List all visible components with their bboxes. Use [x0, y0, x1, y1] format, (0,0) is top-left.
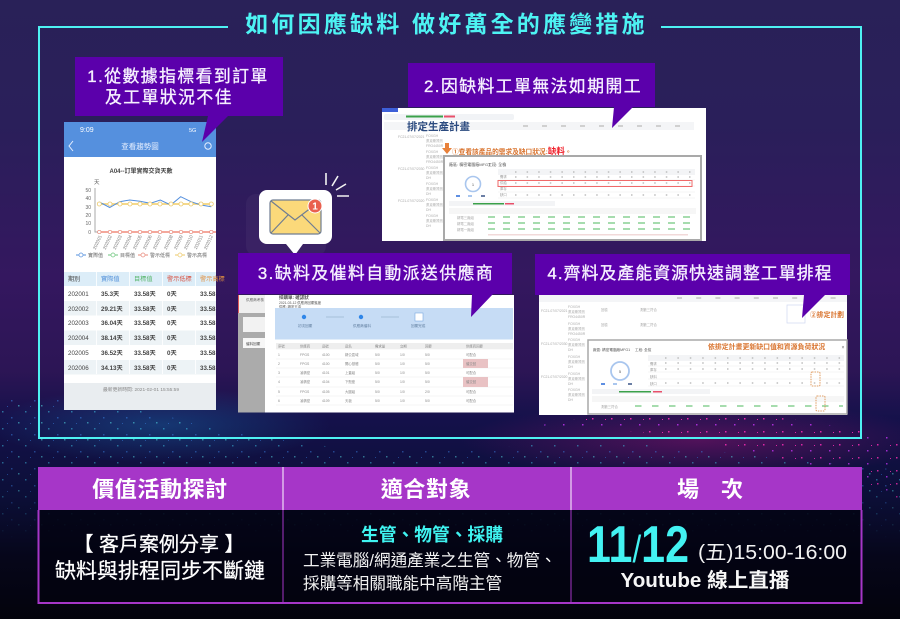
supplier table: 5/0	[425, 353, 430, 357]
data table: 0天	[167, 320, 177, 327]
data table: 34.13天	[101, 365, 123, 372]
line chart: 202004	[122, 234, 133, 250]
modal: 精電二廠組	[457, 221, 475, 226]
schedule rows: 測數三符合	[640, 307, 658, 312]
column: audience: 工業電腦/網通產業之生管、物管、	[303, 551, 557, 570]
supplier table: 4100	[322, 362, 330, 366]
heading: schedule: 排定生產計畫	[407, 120, 470, 133]
supplier table: 5/0	[375, 390, 380, 394]
supplier table: 1/0	[400, 390, 405, 394]
column: value topic: 價值活動探討	[92, 477, 228, 502]
line chart: 202006	[142, 234, 153, 250]
left column rows: FOXGH	[426, 198, 439, 202]
supplier table: 回覆	[425, 344, 432, 348]
panel 4: rescheduling screenshot	[539, 295, 847, 415]
schedule rows: DH	[568, 348, 573, 352]
data table: 202001	[68, 291, 89, 298]
schedule rows: FC21-07/07/2020	[541, 375, 568, 379]
supplier table: 品號	[322, 344, 329, 348]
data table: 33.58	[200, 365, 216, 372]
supplier table: 5/0	[375, 371, 380, 375]
supplier table: 序號	[278, 344, 285, 348]
phone footer: 最新更新時間: 2021-02-01 15:55:59	[103, 386, 179, 393]
supplier table: 凌精密	[300, 370, 311, 375]
progress steps: 初次回覆	[298, 323, 313, 328]
supplier table: 下殼座	[345, 379, 356, 384]
modal	[588, 340, 847, 414]
column: value topic: 【 客戶案例分享 】	[73, 533, 245, 556]
schedule rows: 奧克斯資訊	[568, 392, 586, 397]
dashed highlights	[811, 372, 820, 386]
panel 3: supplier dispatch screenshot	[238, 294, 514, 412]
column: audience: 生管、物管、採購	[361, 524, 503, 545]
progress steps: 回覆完成	[411, 323, 426, 328]
phone header: 查看趨勢圖	[121, 141, 159, 151]
phone header: 9:09	[80, 127, 94, 134]
data table: 0天	[167, 291, 177, 298]
left column rows: FOXGH	[426, 214, 439, 218]
schedule rows: FOXGH	[568, 355, 581, 359]
supplier table: 2/0	[425, 390, 430, 394]
title frame	[39, 27, 861, 438]
column: value topic: 缺料與排程同步不斷鏈	[55, 560, 265, 583]
supplier table: 5/0	[425, 371, 430, 375]
column: value topic	[55, 477, 265, 583]
schedule rows: FOXGH	[568, 338, 581, 342]
left column rows: 奧克斯資訊	[426, 202, 444, 207]
schedule rows	[541, 305, 658, 402]
line chart: 202003	[112, 234, 123, 250]
modal: 需求	[500, 174, 507, 179]
modal: 缺料	[650, 374, 657, 379]
supplier table: 5	[278, 390, 280, 394]
data table: 33.58	[200, 320, 216, 327]
data table: 警示低標	[167, 275, 192, 283]
supplier table: 1	[278, 353, 280, 357]
supplier table: 2	[278, 362, 280, 366]
callout 1: 及工單狀況不佳	[105, 88, 233, 107]
data table: 0天	[167, 350, 177, 357]
icon: envelope notification: 1	[312, 202, 318, 212]
left column rows: 奧克斯資訊	[426, 186, 444, 191]
line chart: 202007	[152, 234, 163, 250]
modal heading: 依排定計畫更新缺口值和資源負荷狀況	[708, 342, 825, 351]
supplier table: 4105	[322, 390, 330, 394]
data table: 33.58	[200, 291, 216, 298]
line chart: 202002	[102, 234, 113, 250]
supplier table: 1/0	[400, 399, 405, 403]
schedule rows: 奧克斯資訊	[568, 309, 586, 314]
line chart: 警示高標	[187, 252, 207, 259]
column: audience: 適合對象	[381, 477, 471, 502]
line chart: 40	[85, 196, 91, 202]
left column rows: FOXGH	[426, 150, 439, 154]
data table: 目標值	[134, 275, 153, 283]
data table: 33.58天	[134, 306, 156, 313]
callout 3: 3.缺料及催料自動派送供應商	[258, 263, 494, 283]
line chart: 天	[94, 179, 100, 186]
icon: envelope notification	[246, 173, 349, 256]
line chart: 警示低標	[150, 252, 170, 259]
data table: 0天	[167, 335, 177, 342]
supplier table: 催交回	[466, 379, 477, 384]
supplier table: 品名	[345, 344, 352, 348]
panel 1: phone screenshot	[64, 122, 225, 410]
line chart: 目標值	[120, 252, 135, 259]
line chart	[76, 167, 216, 259]
schedule rows: FC21-07/07/2021	[541, 309, 568, 313]
line chart: A04--訂單實際交貨天數	[109, 167, 173, 175]
supplier table: 供應商回覆	[466, 344, 484, 348]
supplier table: 凌精密	[300, 398, 311, 403]
data table: 33.58	[200, 306, 216, 313]
data table: 29.21天	[101, 306, 123, 313]
modal: 廠區: 精密電腦廠MFG1	[593, 347, 630, 352]
phone footer	[64, 383, 216, 410]
supplier table: 1/0	[400, 362, 405, 366]
supplier table: 凌精密	[300, 379, 311, 384]
phone header: 5G	[189, 128, 196, 134]
left column rows: FOXGH	[426, 166, 439, 170]
supplier table: 可配合	[466, 398, 477, 403]
modal: 工段: 全檢	[635, 347, 652, 352]
supplier table: 4104	[322, 380, 330, 384]
data table: 202003	[68, 320, 89, 327]
line chart: 20	[85, 213, 91, 219]
left column rows: DH	[426, 176, 431, 180]
supplier table: 上蓋組	[345, 370, 356, 375]
schedule rows: FC21-07/07/2030	[541, 342, 568, 346]
donut	[466, 176, 480, 192]
modal: ×	[842, 345, 845, 351]
supplier table: 1/0	[400, 371, 405, 375]
supplier table: 可配合	[466, 370, 477, 375]
page info: 採購單: 確認狀	[279, 294, 309, 301]
demand grid	[648, 355, 844, 361]
page info: 2021-03-12 供應商回覆進度	[279, 300, 322, 305]
supplier table: 精公區域	[345, 352, 359, 357]
modal: 缺口	[650, 381, 657, 386]
modal: 需求	[650, 361, 657, 366]
modal: 精電三廠組	[457, 215, 475, 220]
data table: 202002	[68, 306, 89, 313]
supplier table: 可配合	[466, 352, 477, 357]
line chart: 202010	[183, 234, 194, 250]
status bar	[384, 114, 514, 120]
supplier table: 可配合	[466, 389, 477, 394]
supplier table: 5/0	[425, 380, 430, 384]
line chart: 202001	[92, 234, 103, 250]
annotation: ①查看該產品的需求及缺口狀況:缺料。	[452, 146, 572, 156]
plan input cell	[787, 305, 805, 323]
left column rows: FOXGH	[426, 182, 439, 186]
data table: 202006	[68, 365, 89, 372]
supplier table: 大圓組	[345, 389, 356, 394]
supplier table: 5/0	[425, 399, 430, 403]
supplier table: 6	[278, 399, 280, 403]
line chart: 202008	[163, 234, 174, 250]
left column rows: 奧克斯資訊	[426, 154, 444, 159]
left column rows: FC21-07/07/2021	[398, 135, 425, 139]
schedule rows: DH	[568, 365, 573, 369]
schedule rows: 奧克斯資訊	[568, 359, 586, 364]
supplier table: 4101	[322, 371, 330, 375]
data table: 33.58天	[134, 365, 156, 372]
data table: 期別	[68, 275, 80, 283]
data table: 36.04天	[101, 320, 123, 327]
supplier table: 5/0	[375, 353, 380, 357]
callout 4	[535, 254, 850, 318]
schedule rows: 奧克斯資訊	[568, 376, 586, 381]
supplier table: 3	[278, 371, 280, 375]
column: session	[587, 477, 847, 592]
callout 1: 1.從數據指標看到訂單	[87, 67, 269, 86]
left column rows: 奧克斯資訊	[426, 138, 444, 143]
modal: 供給	[500, 180, 507, 185]
schedule rows: FOXGH	[568, 372, 581, 376]
resource bar	[449, 201, 555, 206]
progress steps: 供應商催料	[353, 323, 371, 328]
supplier table: 5/0	[425, 362, 430, 366]
data table: 實際值	[101, 275, 120, 283]
column: session: (五)15:00-16:00	[698, 542, 847, 564]
data table: 33.58	[200, 350, 216, 357]
data table: 0天	[167, 306, 177, 313]
supplier table: FPGS	[300, 353, 310, 357]
progress steps	[275, 308, 513, 340]
modal: 精電一廠組	[457, 227, 475, 232]
schedule rows: FRO4450R	[568, 332, 586, 336]
sidebar: 催料回覆	[246, 341, 261, 346]
schedule rows: 奧克斯資訊	[568, 342, 586, 347]
column: audience	[303, 477, 557, 593]
schedule rows: FOXGH	[568, 322, 581, 326]
data table: 35.3天	[101, 291, 120, 298]
info table	[38, 467, 862, 603]
icon: orange down arrow	[442, 143, 452, 154]
left column rows: FC21-07/07/2030	[398, 167, 425, 171]
line chart: 202012	[203, 234, 214, 250]
supplier table: 1/0	[400, 353, 405, 357]
data table: 202004	[68, 335, 89, 342]
line chart: 0	[88, 230, 91, 236]
data table	[64, 272, 225, 374]
schedule rows: DH	[568, 398, 573, 402]
schedule rows: 奧克斯資訊	[568, 326, 586, 331]
load row	[592, 396, 844, 402]
column: audience: 採購等相關職能中高階主管	[303, 574, 502, 593]
left column rows: FOXGH	[426, 134, 439, 138]
callout 2: 2.因缺料工單無法如期開工	[424, 77, 642, 96]
supplier table: 天板	[345, 398, 352, 403]
line chart: 50	[85, 188, 91, 194]
title: 如何因應缺料 做好萬全的應變措施	[245, 11, 648, 37]
line chart: 202009	[173, 234, 184, 250]
supplier table: 5/0	[375, 362, 380, 366]
resource bar	[592, 389, 710, 394]
supplier table: 需求量	[375, 344, 386, 348]
left column rows: 奧克斯資訊	[426, 170, 444, 175]
data table: 33.58天	[134, 320, 156, 327]
schedule rows: 回檢	[601, 307, 608, 312]
annotation: schedule plan: ②排定計劃	[810, 310, 844, 319]
callout 4: 4.齊料及產能資源快速調整工單排程	[547, 264, 833, 283]
data table: 0天	[167, 365, 177, 372]
data table: 36.52天	[101, 350, 123, 357]
data table: 警示高標	[200, 275, 225, 283]
supplier table: 開心基礎	[345, 361, 359, 366]
supplier table: 催交回	[466, 361, 477, 366]
highlighted shortage row	[498, 180, 692, 186]
sidebar: 供應商考核	[246, 297, 264, 302]
line chart: 30	[85, 205, 91, 211]
load grid	[449, 208, 696, 214]
supplier table: 交期	[400, 344, 407, 348]
data table: 33.58	[200, 335, 216, 342]
line chart: 202011	[193, 234, 204, 250]
schedule rows: DH	[568, 382, 573, 386]
data table: 33.58天	[134, 291, 156, 298]
supplier table: 4100	[322, 353, 330, 357]
left column rows: FC21-07/07/2020	[398, 199, 425, 203]
modal: 缺口	[500, 192, 507, 197]
supplier table: FPGS	[300, 362, 310, 366]
data table: 202005	[68, 350, 89, 357]
schedule rows: 回檢	[601, 322, 608, 327]
modal	[444, 156, 701, 240]
schedule rows: 測數二符合	[640, 322, 658, 327]
schedule rows: FOXGH	[568, 388, 581, 392]
callout 3	[238, 253, 512, 317]
supplier table: 1/0	[400, 380, 405, 384]
schedule rows: FOXGH	[568, 305, 581, 309]
left column rows: DH	[426, 192, 431, 196]
modal: 工段: 全檢	[488, 161, 506, 167]
line chart: 10	[85, 221, 91, 227]
sidebar	[238, 295, 265, 412]
data table: 38.14天	[101, 335, 123, 342]
column: session: 場 次	[677, 477, 743, 502]
column: session: Youtube 線上直播	[620, 569, 790, 592]
supplier table: FPGS	[300, 390, 310, 394]
supplier table: 供應商	[300, 344, 311, 348]
modal: 1	[472, 182, 475, 187]
schedule rows: FRO4450R	[568, 315, 586, 319]
donut	[611, 362, 629, 380]
left column rows: FRO4450R	[426, 144, 444, 148]
panel 2: production plan screenshot	[382, 108, 706, 241]
callout 2	[408, 63, 655, 128]
demand grid	[498, 169, 695, 175]
modal: 5	[619, 369, 622, 374]
line chart: 實際值	[88, 252, 103, 259]
left column rows	[398, 134, 444, 228]
supplier table: 4	[278, 380, 280, 384]
modal: 測數三符合	[601, 404, 619, 409]
modal: 廠區: 精密電腦廠MFG1	[449, 161, 491, 167]
supplier table	[276, 343, 513, 405]
left column rows: DH	[426, 208, 431, 212]
left column rows: 奧克斯資訊	[426, 218, 444, 223]
data table: 33.58天	[134, 335, 156, 342]
left column rows: DH	[426, 224, 431, 228]
modal: 庫存	[500, 186, 507, 191]
data table: 33.58天	[134, 350, 156, 357]
supplier table: 5/0	[375, 399, 380, 403]
callout 1	[75, 57, 283, 142]
line chart: 202005	[132, 234, 143, 250]
left column rows: FRO4450R	[426, 160, 444, 164]
supplier table: 4109	[322, 399, 330, 403]
supplier table: 5/0	[375, 380, 380, 384]
page info: 供應: 精密五金	[279, 304, 302, 309]
modal: 庫存	[650, 367, 657, 372]
page info	[279, 294, 322, 309]
column: session: 11/12	[587, 516, 689, 574]
phone header	[64, 122, 216, 157]
